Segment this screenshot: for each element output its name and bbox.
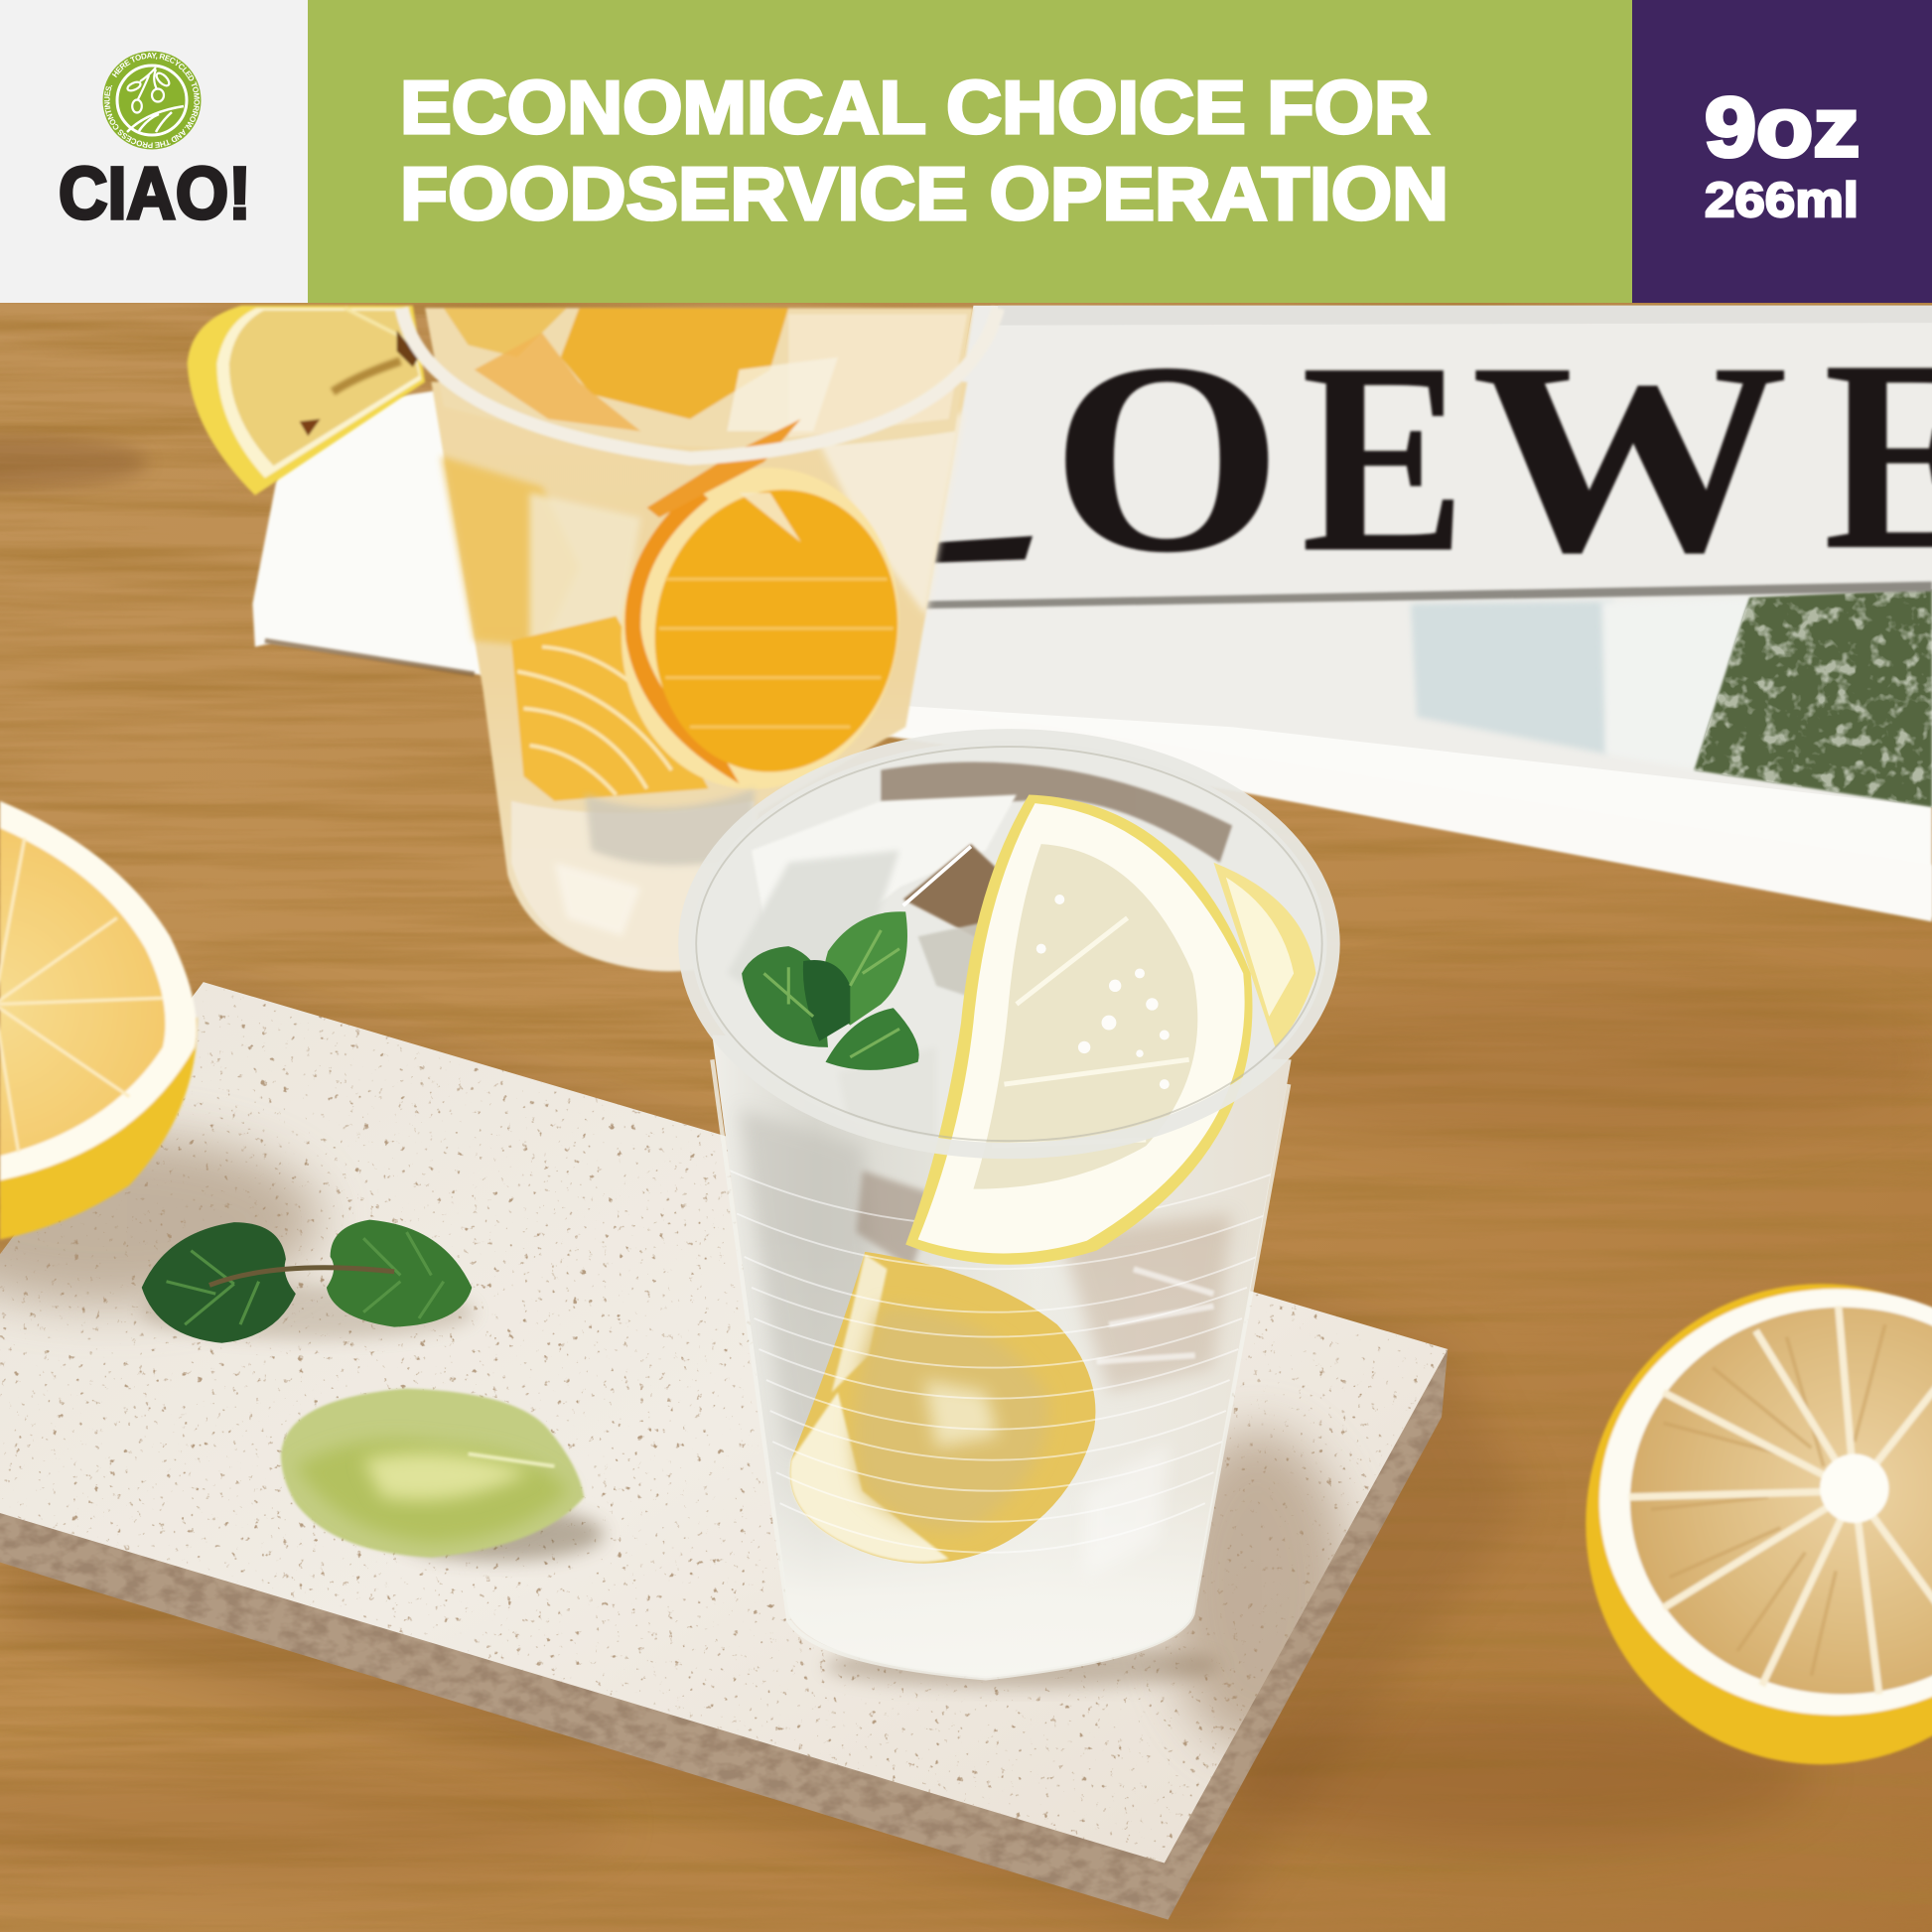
headline line 2: FOODSERVICE OPERATION (400, 152, 1449, 235)
base of back cup (511, 801, 755, 971)
slab side face (0, 1343, 1453, 1922)
slab top face (0, 973, 1453, 1872)
back cup body (431, 382, 967, 971)
orange slice upper in back cup (620, 419, 899, 788)
headline line 1: ECONOMICAL CHOICE FOR (400, 66, 1430, 149)
book with LOEWE cover: W (1471, 306, 1789, 610)
book with LOEWE cover (252, 303, 1932, 921)
left lemon half (0, 801, 198, 1240)
book with LOEWE cover: O (1051, 306, 1283, 610)
back cup with orange slices (188, 306, 998, 971)
size panel (1632, 0, 1932, 303)
front cup rim (686, 737, 1332, 1151)
size in millilitres: 266ml (1705, 174, 1859, 227)
logo badge: HERE TODAY, RECYCLED TOMORROW. AND THE PROCESS CONTINUES. (104, 53, 201, 149)
ice and drink in back cup (425, 308, 973, 448)
logo panel (0, 0, 308, 303)
water and ice surface (691, 741, 1327, 1159)
brand wordmark: CIAO! (59, 152, 251, 234)
mint in front cup (742, 911, 919, 1070)
cup ribs (730, 1171, 1282, 1553)
back cup rim (402, 308, 998, 459)
book with LOEWE cover: E (1302, 306, 1466, 610)
front cup (686, 737, 1332, 1688)
lemon wedge on back cup rim (188, 306, 425, 495)
mint sprig on slab (142, 1220, 475, 1343)
upper lemon slice in front cup (905, 794, 1315, 1265)
orange slice lower in back cup (511, 617, 709, 801)
size in ounces: 9oz (1705, 80, 1860, 174)
headline panel (308, 0, 1632, 303)
front cup body (690, 1023, 1318, 1688)
green grape half (281, 1389, 604, 1561)
right lemon half (1586, 1284, 1932, 1764)
lower lemon slice in front cup (790, 1252, 1095, 1564)
front cup outline (712, 1059, 1289, 1678)
stone slab (0, 973, 1528, 1932)
